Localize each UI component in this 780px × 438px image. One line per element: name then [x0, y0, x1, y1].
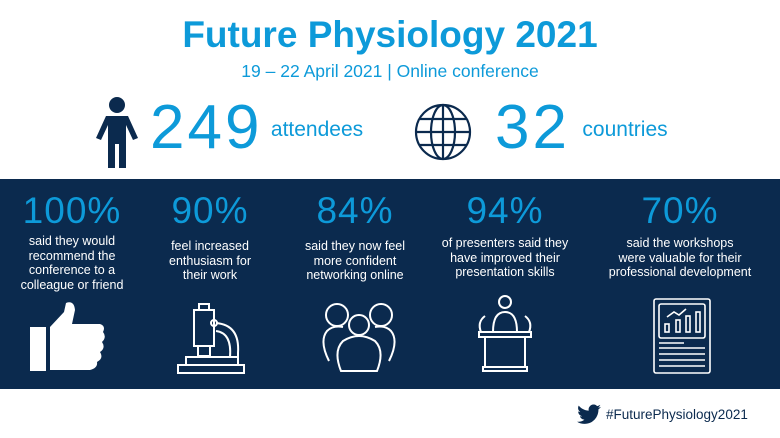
title: Future Physiology 2021 [182, 14, 598, 55]
footer: twitter hashtag [577, 404, 748, 424]
subtitle: 19 – 22 April 2021 | Online conference [241, 61, 539, 81]
stat 100%: recommend the [29, 248, 115, 262]
stat 100%: colleague or friend [21, 278, 123, 292]
stat: countries: 32 countries [495, 93, 668, 162]
stat 84%: 84% [316, 190, 394, 231]
stat 100%: 100% [23, 190, 121, 231]
stat 70%: 70% [641, 190, 719, 231]
icon: person [96, 97, 138, 168]
stat 94%: presentation skills [455, 265, 555, 279]
stat 84%: networking online [306, 268, 404, 282]
footer: twitter hashtag: #FuturePhysiology2021 [606, 407, 748, 422]
stat 100%: said they would [29, 234, 115, 248]
stat 94%: 94% [466, 190, 544, 231]
stat 84%: more confident [314, 254, 396, 268]
stat 84% [305, 190, 405, 372]
stat 90%: 90% [171, 190, 249, 231]
stat 90% [169, 190, 251, 374]
icon: group [322, 303, 396, 372]
stat 70%: were valuable for their [618, 250, 741, 264]
stat 70%: said the workshops [626, 236, 734, 250]
stat 100%: conference to a [29, 263, 115, 277]
stat 94%: have improved their [450, 250, 560, 264]
icon: report [653, 298, 711, 374]
icon: thumbs up [30, 302, 105, 371]
stat 94%: of presenters said they [442, 236, 568, 250]
icon: globe [414, 104, 472, 160]
stat 90%: their work [183, 268, 237, 282]
icon: twitter bird [577, 404, 601, 424]
stat 94% [442, 190, 568, 372]
stat: attendees: 249 attendees [150, 93, 363, 162]
stat 70%: professional development [609, 265, 751, 279]
stat 90%: enthusiasm for [169, 254, 251, 268]
stat 70% [609, 190, 752, 374]
stat 84%: said they now feel [305, 239, 405, 253]
stat 100% [21, 190, 123, 371]
stat 90%: feel increased [171, 239, 249, 253]
icon: podium [478, 295, 532, 372]
panel: survey results [0, 179, 780, 389]
icon: microscope [177, 303, 245, 374]
